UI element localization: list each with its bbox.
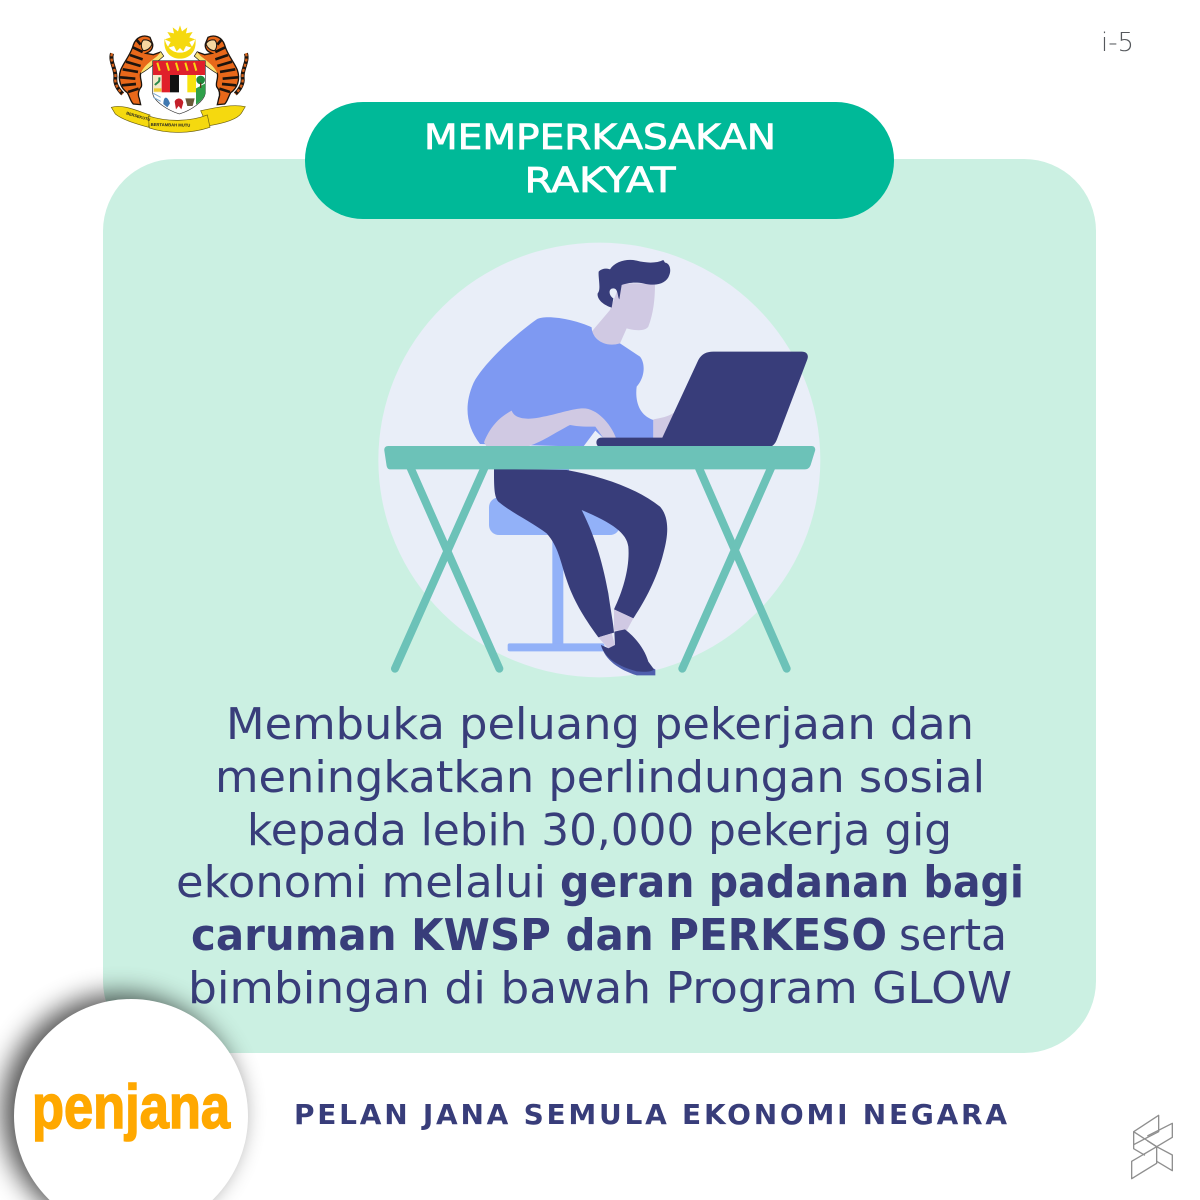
body text: bimbingan di bawah Program GLOW xyxy=(188,963,1012,1014)
neck and face xyxy=(592,283,655,345)
backdrop circle xyxy=(378,243,820,677)
trousers xyxy=(494,469,667,637)
shoe sole xyxy=(601,645,655,675)
desk legs xyxy=(395,467,787,669)
hair xyxy=(598,260,670,308)
shoe xyxy=(601,629,654,672)
stool xyxy=(489,497,620,651)
laptop xyxy=(596,352,808,447)
arm xyxy=(484,408,616,447)
heading pill: MEMPERKASAKAN xyxy=(424,118,776,158)
logo badge: penjana: penjana xyxy=(32,1073,230,1142)
body text xyxy=(176,699,1024,1014)
panel: main mint background xyxy=(103,159,1096,1053)
body text: kepada lebih 30,000 pekerja gig xyxy=(247,805,952,856)
icon: Malaysian coat of arms xyxy=(111,25,247,132)
emblem scroll motto: BERTAMBAH MUTU xyxy=(151,122,190,128)
body text: ekonomi melalui xyxy=(176,857,546,908)
logo badge: penjana xyxy=(2,994,248,1200)
heading pill: RAKYAT xyxy=(524,161,676,201)
body text: geran padanan bagi xyxy=(560,857,1024,908)
gap beneath arm xyxy=(583,431,603,447)
body text: caruman KWSP dan PERKESO xyxy=(191,910,887,961)
emblem scroll motto: BERSEKUTU xyxy=(126,110,151,122)
footer tagline: PELAN JANA SEMULA EKONOMI NEGARA xyxy=(294,1098,1007,1131)
desk top xyxy=(384,446,815,469)
icon: publisher mark xyxy=(1132,1115,1172,1179)
emblem scroll motto xyxy=(126,110,190,128)
far hand xyxy=(653,413,674,438)
body text: serta xyxy=(899,910,1007,961)
page number: i-5 xyxy=(1101,28,1134,58)
ankles xyxy=(598,609,633,649)
sweater xyxy=(468,317,653,447)
heading pill xyxy=(305,102,894,219)
illustration: man working on laptop at desk xyxy=(378,243,820,677)
body text: Membuka peluang pekerjaan dan xyxy=(226,699,974,750)
body text: meningkatkan perlindungan sosial xyxy=(215,752,985,803)
